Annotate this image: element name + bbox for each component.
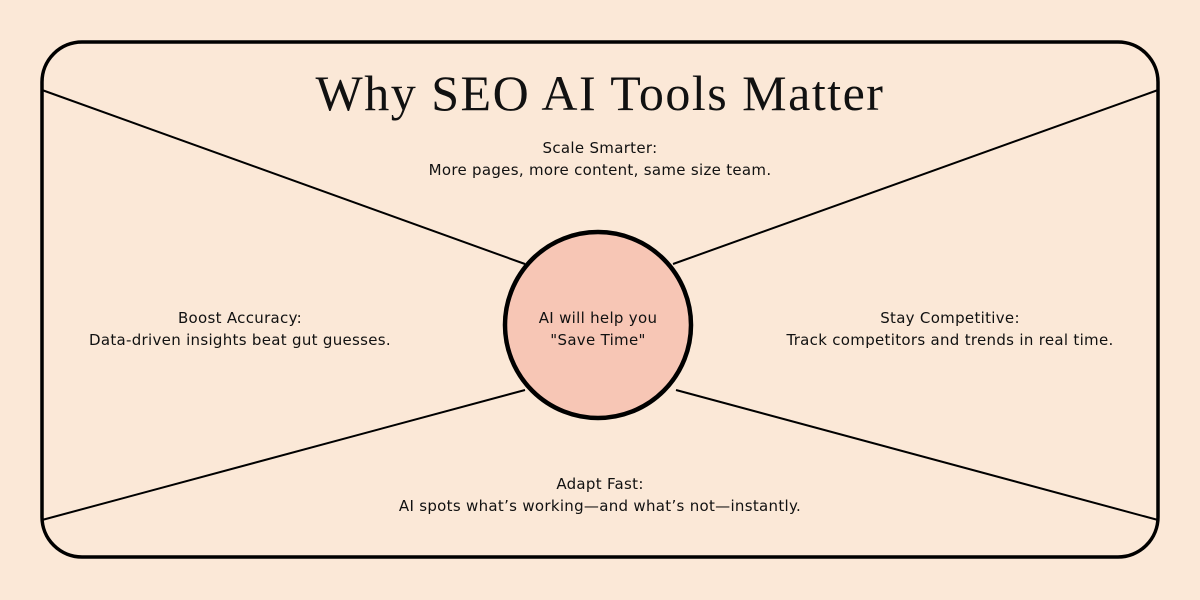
text: stay competitive	[786, 309, 1114, 349]
center circle text	[538, 309, 657, 349]
text: boost accuracy	[89, 309, 391, 349]
text: adapt fast	[399, 475, 801, 515]
text: scale smarter	[429, 139, 771, 179]
text: stay competitive: Stay Competitive:	[880, 309, 1020, 327]
text: scale smarter: Scale Smarter:	[543, 139, 657, 157]
text: boost accuracy: Data-driven insights beat gut guesses.	[89, 331, 391, 349]
text: boost accuracy: Boost Accuracy:	[178, 309, 302, 327]
title: Why SEO AI Tools Matter	[316, 65, 884, 121]
text: adapt fast: AI spots what’s working—and what’s not—instantly.	[399, 497, 801, 515]
text: scale smarter: More pages, more content, same size team.	[429, 161, 771, 179]
center circle text: "Save Time"	[550, 331, 646, 349]
center circle text: AI will help you	[539, 309, 657, 327]
text: adapt fast: Adapt Fast:	[556, 475, 644, 493]
text: stay competitive: Track competitors and trends in real time.	[786, 331, 1114, 349]
